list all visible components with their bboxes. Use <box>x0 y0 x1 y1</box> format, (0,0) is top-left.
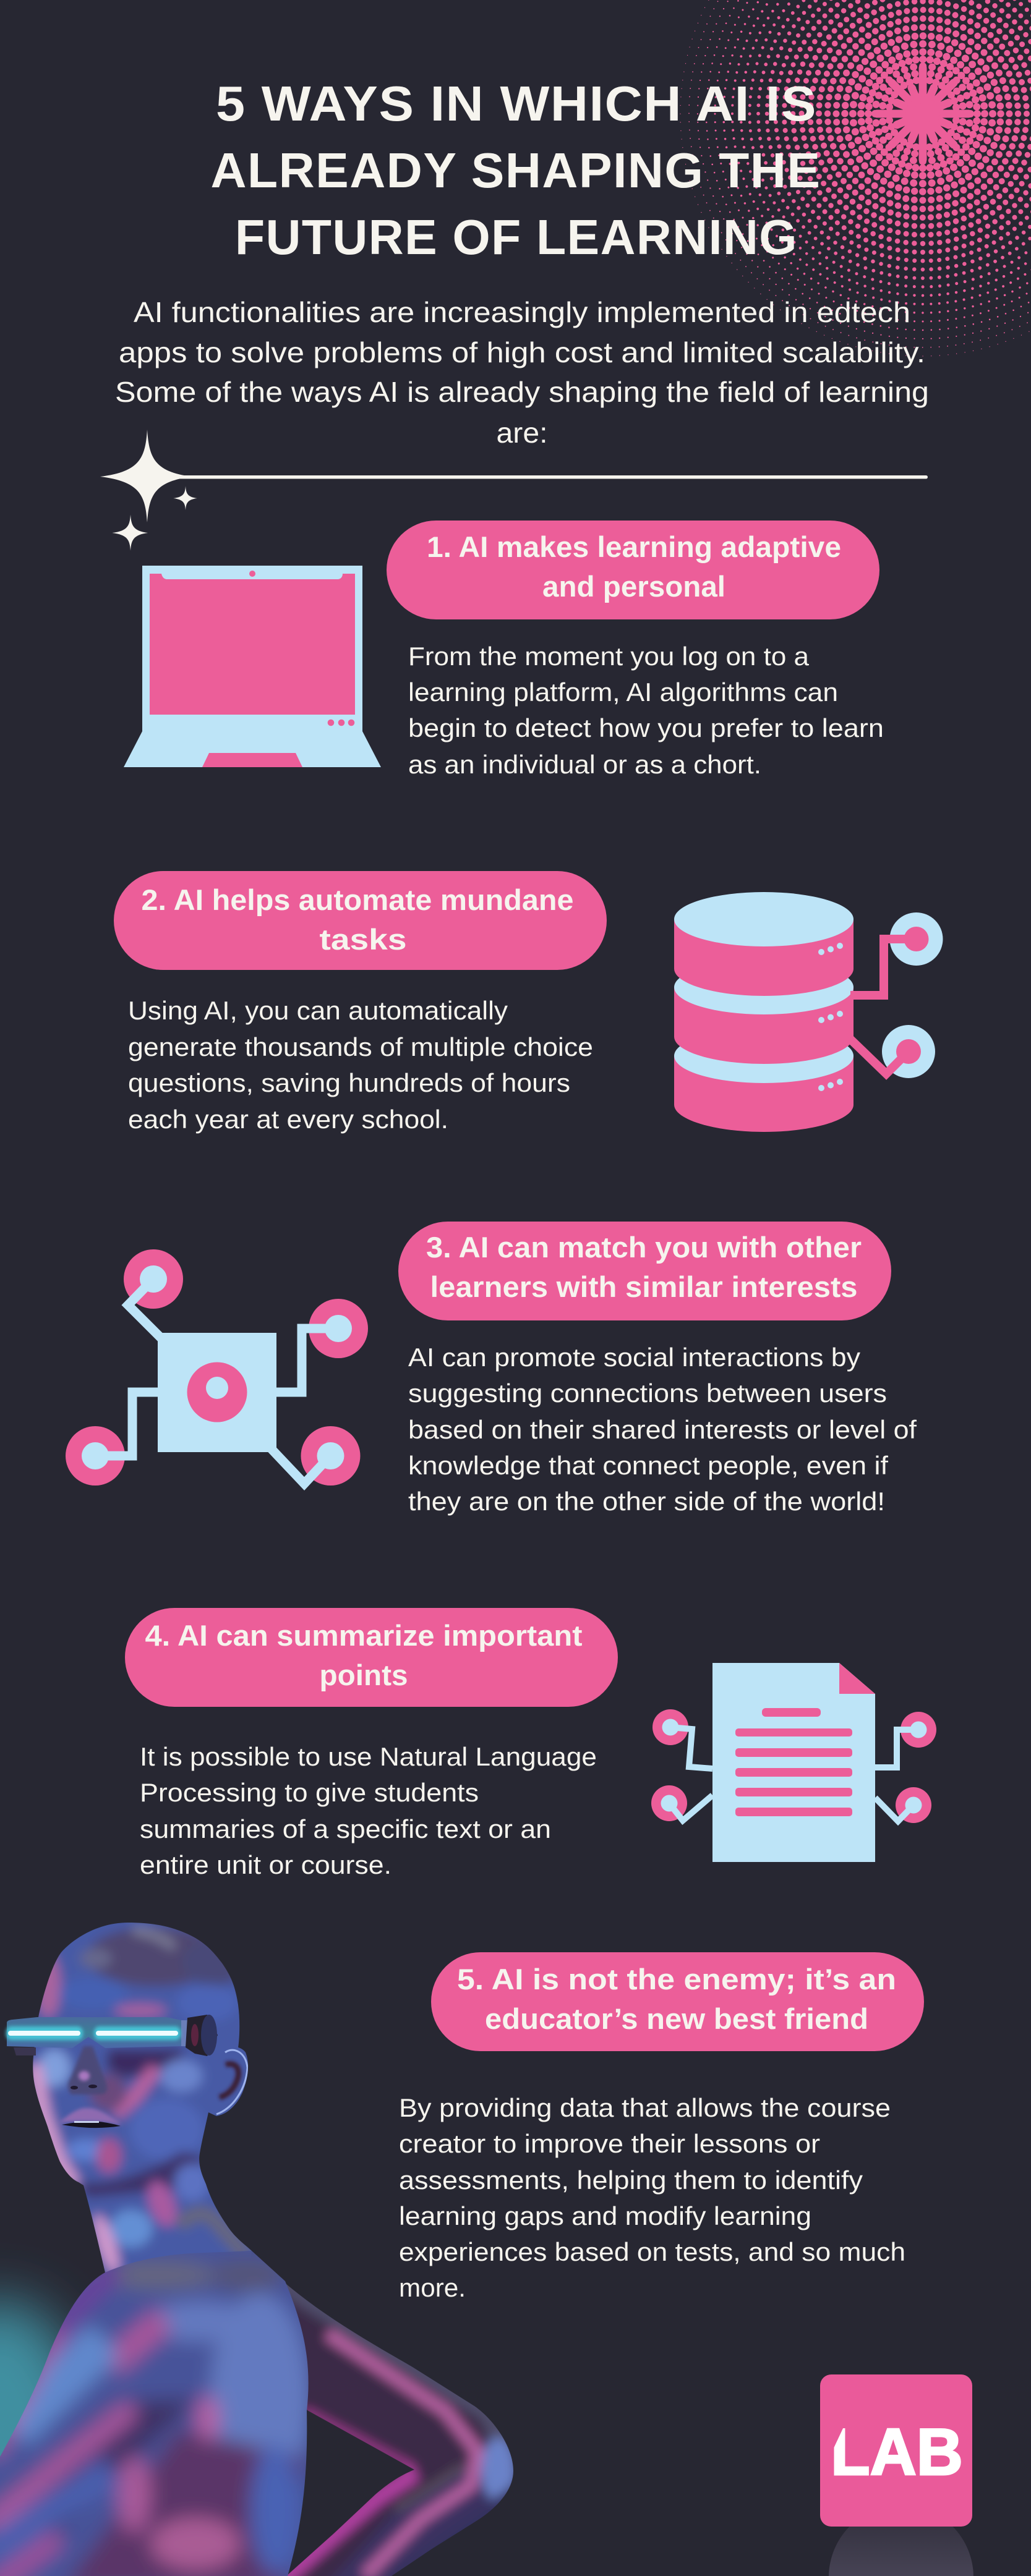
text block 1 <box>408 642 884 779</box>
text block 5: experiences based on tests, and so much <box>399 2237 905 2266</box>
pill heading 1: 1. AI makes learning adaptive <box>427 530 841 563</box>
divider with sparkles <box>100 430 928 551</box>
pill heading 2: 2. AI helps automate mundane <box>141 883 574 916</box>
text block 3 <box>408 1343 917 1516</box>
title <box>210 76 821 265</box>
icon: medium sparkle <box>112 514 148 551</box>
text block 1: begin to detect how you prefer to learn <box>408 713 884 742</box>
pill heading 2: tasks <box>319 923 407 956</box>
text block 3: they are on the other side of the world! <box>408 1487 885 1516</box>
text block 3: based on their shared interests or level of <box>408 1415 917 1444</box>
pill heading 5 <box>431 1952 924 2051</box>
text block 1: From the moment you log on to a <box>408 642 810 671</box>
glow semicircle behind logo <box>829 2505 973 2576</box>
pill heading 5: 5. AI is not the enemy; it’s an <box>457 1963 896 1996</box>
halftone dot burst <box>680 0 1031 356</box>
text block 2: Using AI, you can automatically <box>128 996 508 1025</box>
text block 4 <box>140 1742 597 1879</box>
logo: LAB <box>831 2415 963 2489</box>
visor <box>6 2015 218 2056</box>
text block 2: generate thousands of multiple choice <box>128 1032 593 1061</box>
pill heading 3: learners with similar interests <box>430 1270 857 1303</box>
intro paragraph: Some of the ways AI is already shaping the field of learning <box>115 376 929 408</box>
ear <box>216 2050 247 2114</box>
title: FUTURE OF LEARNING <box>235 210 798 265</box>
text block 4: entire unit or course. <box>140 1850 391 1879</box>
pill heading 3 <box>398 1222 891 1320</box>
lips <box>59 2108 122 2125</box>
text block 4: It is possible to use Natural Language <box>140 1742 597 1771</box>
text block 5: assessments, helping them to identify <box>399 2166 863 2195</box>
text block 4: summaries of a specific text or an <box>140 1814 551 1843</box>
icon: document <box>651 1663 936 1862</box>
pill heading 5: educator’s new best friend <box>485 2002 868 2035</box>
intro paragraph: AI functionalities are increasingly implemented in edtech <box>134 296 910 328</box>
logo <box>820 2374 972 2527</box>
icon: small sparkle <box>173 486 197 510</box>
icon: laptop <box>124 566 381 767</box>
icon: circuit chip <box>66 1249 368 1486</box>
text block 5 <box>399 2093 905 2302</box>
pill heading 4 <box>125 1608 618 1707</box>
pill heading 3: 3. AI can match you with other <box>426 1231 862 1264</box>
icon: database <box>674 892 943 1132</box>
text block 1: learning platform, AI algorithms can <box>408 678 838 707</box>
teal glow <box>0 2300 93 2576</box>
icon: large sparkle <box>100 430 192 522</box>
pill heading 1 <box>387 521 879 619</box>
nose <box>68 2046 107 2094</box>
intro paragraph <box>115 296 929 449</box>
text block 3: AI can promote social interactions by <box>408 1343 860 1372</box>
text block 2: questions, saving hundreds of hours <box>128 1068 570 1097</box>
head and neck <box>33 1923 252 2272</box>
text block 3: suggesting connections between users <box>408 1379 887 1408</box>
text block 5: learning gaps and modify learning <box>399 2201 811 2230</box>
title: ALREADY SHAPING THE <box>210 143 821 198</box>
text block 4: Processing to give students <box>140 1778 479 1807</box>
pill heading 1: and personal <box>542 570 725 603</box>
intro paragraph: apps to solve problems of high cost and limited scalability. <box>119 336 925 368</box>
text block 3: knowledge that connect people, even if <box>408 1451 888 1480</box>
text block 2: each year at every school. <box>128 1105 448 1134</box>
text block 5: more. <box>399 2273 466 2302</box>
text block 5: creator to improve their lessons or <box>399 2129 820 2158</box>
text block 1: as an individual or as a chort. <box>408 750 761 779</box>
text block 5: By providing data that allows the course <box>399 2093 891 2122</box>
pill heading 4: points <box>319 1659 408 1691</box>
text block 2 <box>128 996 593 1134</box>
intro paragraph: are: <box>496 417 548 449</box>
pill heading 2 <box>114 871 607 970</box>
title: 5 WAYS IN WHICH AI IS <box>216 76 817 131</box>
torso <box>0 2238 322 2576</box>
pill heading 4: 4. AI can summarize important <box>145 1619 583 1652</box>
illustration: metallic figure with visor <box>0 1904 532 2576</box>
rear arm <box>286 2284 513 2576</box>
